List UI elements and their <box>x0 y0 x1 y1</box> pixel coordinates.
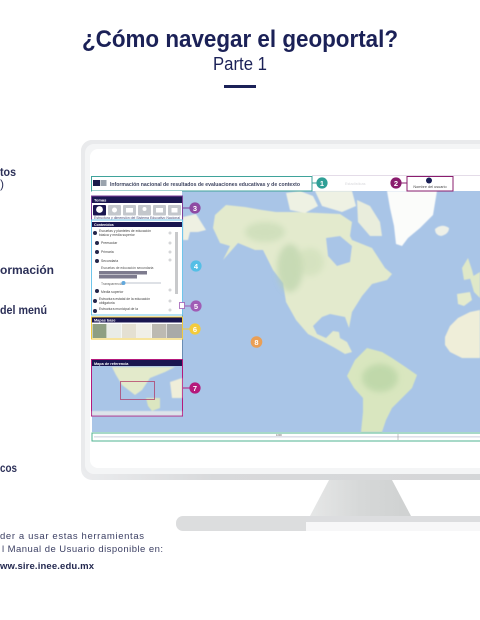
panel: contenidos: Transparencia <box>101 282 123 286</box>
faint menu item: Estadísticas <box>345 182 366 186</box>
marker 1: 1 <box>320 179 324 188</box>
panel: contenidos: Secundaria <box>101 259 118 263</box>
marker 2: 2 <box>394 179 398 188</box>
monitor stand <box>176 480 480 531</box>
user box: Nombre del usuario <box>413 185 447 189</box>
scale bar <box>92 433 480 441</box>
left labels: del menú <box>0 303 47 317</box>
left labels <box>0 165 54 475</box>
panel: contenidos: básica y media superior <box>99 233 136 237</box>
manual note: der a usar estas herramientas <box>0 531 144 542</box>
monitor <box>81 140 480 480</box>
marker 8: 8 <box>254 338 259 347</box>
Hudson Bay <box>326 236 352 266</box>
manual note: ww.sire.inee.edu.mx <box>0 561 95 572</box>
collapse button <box>180 302 184 308</box>
marker 7: 7 <box>193 384 197 393</box>
title underline <box>224 85 256 88</box>
marker 3 <box>183 202 201 214</box>
left labels: ormación <box>0 263 54 277</box>
header bar <box>92 176 312 191</box>
marker 1 <box>312 177 328 189</box>
left labels: cos <box>0 461 17 475</box>
panel: mapas base <box>92 317 182 339</box>
green tint <box>245 222 285 242</box>
marker 5: 5 <box>194 302 198 311</box>
panel: contenidos: obligatoria <box>99 301 115 305</box>
panel: contenidos: Contenidos <box>94 223 114 227</box>
marker 7 <box>183 382 201 394</box>
marker 3: 3 <box>193 204 197 213</box>
scale bar: 1000 <box>276 433 282 437</box>
user box <box>407 176 453 191</box>
header bar: Información nacional de resultados de evaluaciones educativas y de contexto <box>110 182 301 188</box>
panel: contenidos: Media superior <box>101 290 124 294</box>
marker 6 <box>183 323 201 335</box>
left labels: ) <box>0 177 4 191</box>
panel: mapa de referencia <box>92 360 182 416</box>
sidebar <box>92 191 182 359</box>
marker 2 <box>390 177 407 189</box>
marker 4 <box>190 260 202 272</box>
title: ¿Cómo navegar el geoportal? <box>82 26 398 53</box>
panel: contenidos: Estructura estatal de la educación <box>99 297 150 301</box>
marker 8 <box>251 336 262 348</box>
panel: contenidos: Preescolar <box>101 241 118 245</box>
manual note: l Manual de Usuario disponible en: <box>2 544 163 555</box>
subtitle: Parte 1 <box>213 54 267 74</box>
marker 4: 4 <box>194 262 199 271</box>
manual note <box>0 531 163 572</box>
panel: contenidos <box>92 220 182 315</box>
panel: contenidos: Estructura municipal de la <box>99 307 138 311</box>
panel: contenidos: Primaria <box>101 250 114 254</box>
panel: temas <box>92 196 182 220</box>
left labels: tos <box>0 165 16 179</box>
panel: contenidos: Escuelas de educación secundaria <box>101 266 154 270</box>
menu separator <box>312 175 480 176</box>
panel: temas: Temas <box>94 198 107 202</box>
marker 6: 6 <box>193 325 197 334</box>
panel: mapa de referencia: Mapa de referencia <box>94 362 129 366</box>
land masses <box>183 191 480 432</box>
marker 5 <box>185 300 202 312</box>
panel: temas: Estructura y dimensión del Sistema Educativo Nacional <box>94 216 180 220</box>
world map <box>92 191 480 432</box>
panel: mapas base: Mapas base <box>94 318 116 322</box>
panel: contenidos: Escuelas y planteles de educación <box>99 229 151 233</box>
